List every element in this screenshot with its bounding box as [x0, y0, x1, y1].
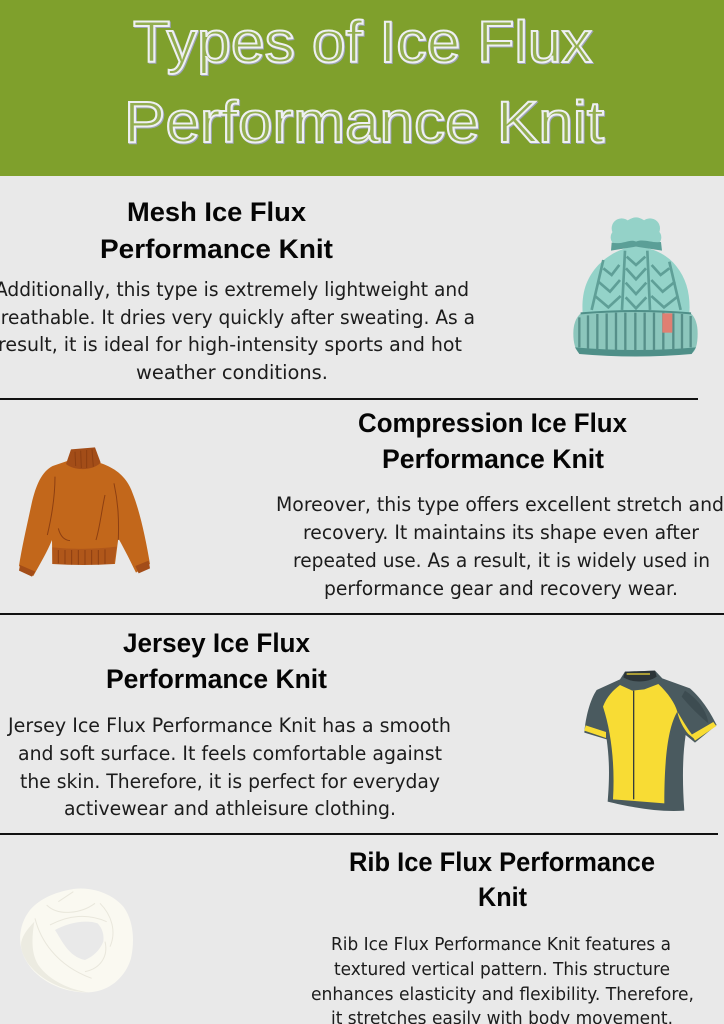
heading: jersey	[106, 628, 327, 694]
icon: white scarf	[20, 889, 133, 992]
text block: jersey: Jersey Ice Flux Performance Knit has a smooth	[6, 714, 451, 737]
header banner	[0, 0, 724, 176]
heading: jersey: Jersey Ice Flux	[123, 628, 310, 658]
title	[124, 10, 604, 155]
divider 1	[0, 398, 698, 400]
divider 3	[0, 833, 718, 835]
text block: jersey	[6, 714, 451, 820]
text block: mesh: Additionally, this type is extremely lightweight and	[0, 278, 469, 301]
text block: compression: performance gear and recovery wear.	[324, 577, 678, 600]
heading: compression: Performance Knit	[382, 444, 604, 474]
heading: jersey: Performance Knit	[106, 664, 327, 694]
text block: rib	[311, 935, 694, 1024]
icon: cycling jersey	[584, 671, 717, 811]
text block: jersey: the skin. Therefore, it is perfect for everyday	[20, 770, 440, 793]
panel: rib knit	[20, 847, 694, 1024]
text block: rib: Rib Ice Flux Performance Knit features a	[331, 935, 671, 955]
heading: compression: Compression Ice Flux	[358, 408, 627, 438]
heading: mesh: Mesh Ice Flux	[127, 197, 306, 227]
text block: mesh: weather conditions.	[136, 361, 328, 384]
heading: compression	[358, 408, 627, 474]
title: Types of Ice Flux	[133, 10, 592, 75]
panel: compression knit	[19, 408, 724, 600]
text block: rib: textured vertical pattern. This structure	[334, 960, 670, 980]
heading: mesh: Performance Knit	[100, 234, 333, 264]
panel: mesh knit	[0, 197, 698, 384]
heading: mesh	[100, 197, 333, 264]
text block: compression: repeated use. As a result, it is widely used in	[293, 549, 710, 572]
text block: rib: enhances elasticity and flexibility. Therefore,	[311, 985, 694, 1005]
divider 2	[0, 613, 724, 615]
icon: orange sweater	[19, 447, 150, 577]
heading: rib: Rib Ice Flux Performance	[349, 847, 655, 877]
text block: compression	[276, 493, 724, 600]
text block: jersey: activewear and athleisure clothing.	[64, 797, 396, 820]
heading: rib: Knit	[478, 882, 527, 912]
text block: mesh: breathable. It dries very quickly after sweating. As a	[0, 306, 475, 329]
icon: knit beanie	[573, 217, 698, 356]
heading: rib	[349, 847, 655, 912]
text block: jersey: and soft surface. It feels comfortable against	[18, 742, 442, 765]
text block: mesh: result, it is ideal for high-intensity sports and hot	[0, 333, 462, 356]
panel: jersey knit	[6, 628, 717, 820]
title: Performance Knit	[124, 90, 604, 155]
text block: compression: recovery. It maintains its shape even after	[303, 521, 700, 544]
text block: mesh	[0, 278, 475, 384]
